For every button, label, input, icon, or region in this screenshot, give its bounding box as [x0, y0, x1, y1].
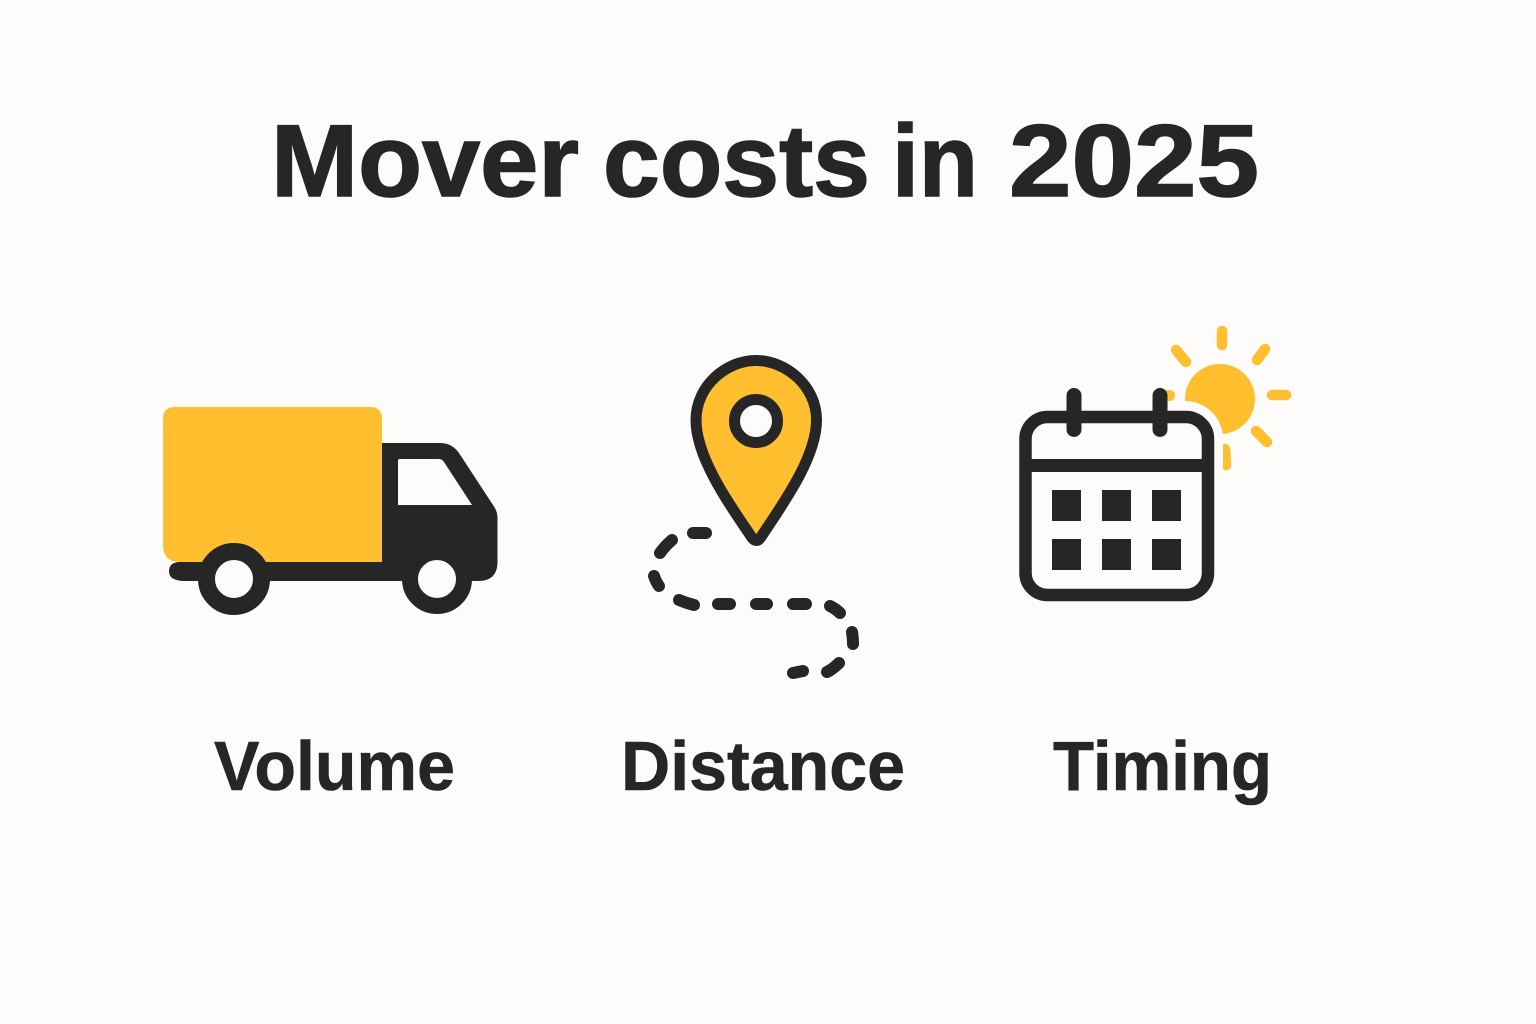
map pin	[696, 360, 816, 540]
truck cargo box	[163, 407, 382, 562]
truck cab window	[398, 459, 472, 505]
icon: sun	[1166, 331, 1286, 465]
truck cab and chassis	[169, 443, 498, 581]
sun rays	[1176, 331, 1286, 465]
truck rear wheel	[206, 552, 262, 606]
title: in	[892, 104, 978, 218]
calendar halo	[1009, 401, 1223, 611]
title: Mover	[271, 104, 579, 218]
dashed route	[654, 533, 853, 673]
sun left ray fragment	[1166, 390, 1175, 401]
title	[271, 104, 1259, 218]
sun disc	[1185, 364, 1255, 434]
calendar header divider	[1026, 459, 1208, 472]
title: 2025	[1009, 104, 1259, 218]
pin centre ring	[734, 400, 778, 442]
icon: map pin with dashed route	[654, 360, 853, 673]
icon: delivery truck	[163, 407, 498, 606]
label: Volume: Volume	[214, 727, 455, 805]
label: Distance: Distance	[621, 727, 905, 805]
calendar date squares	[1052, 490, 1181, 570]
calendar body	[1026, 417, 1208, 595]
label: Timing: Timing	[1053, 727, 1272, 805]
icon: calendar	[1009, 396, 1223, 611]
truck front wheel	[410, 552, 464, 606]
calendar binder rings	[1074, 396, 1160, 430]
title: costs	[603, 104, 870, 218]
